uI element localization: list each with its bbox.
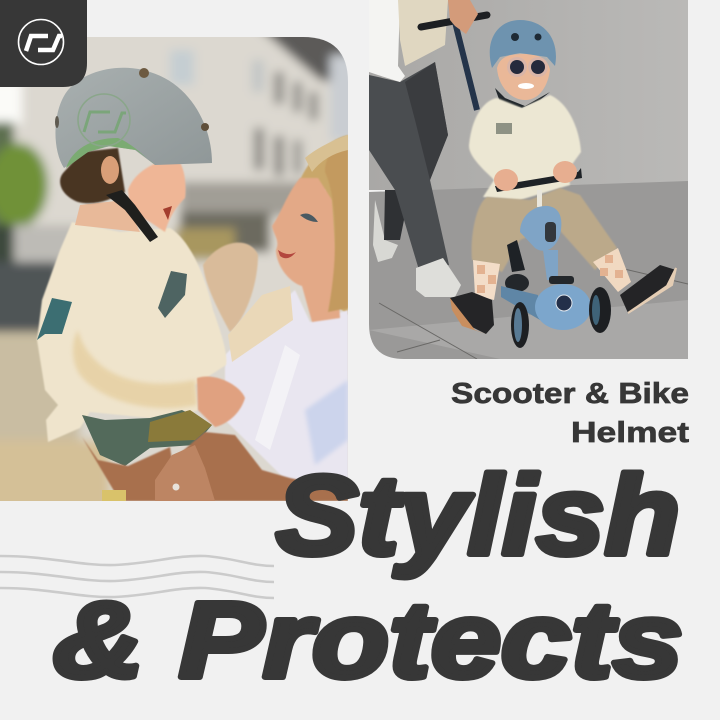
sweater chest badge — [158, 271, 187, 318]
headline: Stylish: Stylish — [276, 453, 680, 578]
mother face and neck — [272, 178, 340, 322]
scooter logo — [556, 295, 572, 311]
sunglasses — [507, 57, 548, 77]
blurred street background — [0, 37, 348, 501]
mother hair strands — [325, 136, 348, 312]
subtitle line 2: Helmet — [571, 417, 689, 449]
hands on handlebar — [495, 168, 582, 192]
parent jacket — [398, 0, 448, 66]
scooter wheels — [511, 302, 529, 348]
parent back sneaker — [373, 200, 398, 262]
child sweater — [37, 222, 226, 442]
shoes — [450, 292, 494, 334]
logo badge — [0, 0, 87, 87]
photo: child riding blue scooter — [369, 0, 688, 359]
grey helmet — [55, 68, 212, 168]
blue helmet — [490, 20, 556, 68]
push handle — [421, 15, 487, 27]
helmet vents — [139, 68, 149, 78]
helmet green visor band — [66, 138, 156, 168]
wavy decorative lines — [0, 556, 274, 598]
child hand — [197, 376, 245, 427]
child face — [497, 54, 550, 100]
helmet logo — [78, 94, 130, 146]
helmet chin strap — [106, 190, 158, 242]
parent jeans back leg — [384, 190, 404, 240]
mother hands — [82, 432, 348, 501]
headline: & Protects: & Protects — [53, 579, 683, 700]
subtitle line 1: Scooter & Bike — [451, 378, 689, 410]
concrete wall — [369, 0, 688, 190]
mother hair — [298, 135, 348, 315]
mother eye and mouth — [300, 214, 318, 222]
logo icon — [18, 20, 64, 64]
scooter body — [537, 190, 542, 207]
child face — [128, 160, 186, 232]
neck collar — [495, 88, 550, 108]
photo: mother and child with grey helmet — [0, 37, 348, 501]
smile — [518, 83, 534, 89]
sweater patch sleeve — [37, 298, 72, 340]
parent sneaker front — [416, 258, 461, 297]
checkered socks — [473, 260, 500, 300]
fleece collar and sleeve — [203, 243, 258, 332]
parent shirt — [369, 0, 405, 82]
mother shirt — [225, 290, 348, 484]
child sweater — [469, 95, 581, 200]
pavement — [369, 181, 688, 359]
child shorts — [82, 410, 212, 466]
parent jeans — [369, 62, 449, 270]
khaki pants — [472, 188, 617, 272]
parent hand — [448, 0, 478, 34]
child neck and ear — [75, 200, 140, 232]
